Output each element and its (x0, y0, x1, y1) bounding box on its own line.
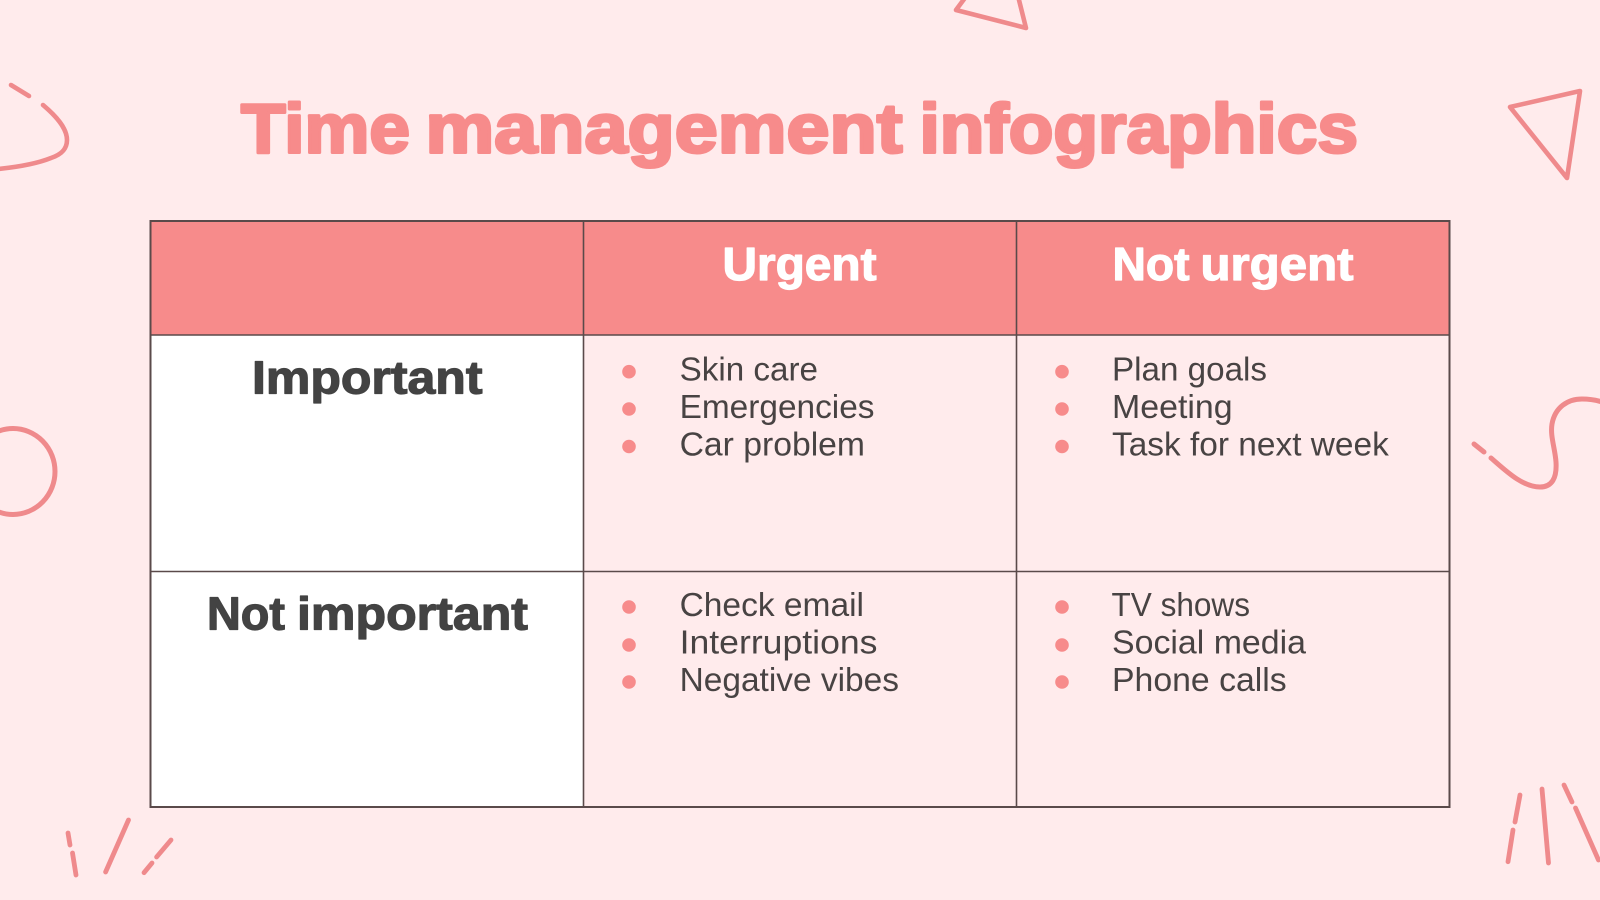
cell: urgent and important: Emergencies (680, 389, 874, 426)
column header: Urgent: Urgent (722, 238, 876, 290)
column header: Not urgent: urgent (1200, 238, 1354, 290)
title (241, 90, 1358, 168)
cell: not urgent and not important: TV shows (1112, 587, 1250, 624)
doodle: bottom-right dashes (1508, 785, 1598, 863)
column header: Not urgent (1112, 238, 1354, 290)
cell: not urgent and important (1055, 352, 1389, 464)
cell: not urgent and not important: Phone calls (1112, 662, 1287, 699)
cell: urgent and important: Skin care (680, 352, 818, 388)
row header: Not important (207, 588, 528, 640)
cell: not urgent and important: Meeting (1112, 389, 1233, 426)
row header: Not important: important (297, 588, 528, 640)
table header band (150, 221, 1450, 335)
cell: urgent and not important: Check email (680, 587, 864, 624)
cell: urgent and not important (622, 587, 899, 699)
column header: Not urgent: Not (1112, 238, 1190, 290)
title: management (426, 90, 902, 168)
table (150, 221, 1450, 807)
title: infographics (920, 90, 1358, 168)
cell: not urgent and not important (1055, 587, 1306, 699)
cell: urgent and important: Car problem (680, 426, 865, 464)
cell: urgent and not important: Negative vibes (680, 662, 899, 699)
doodle: right triangle (1510, 91, 1580, 178)
cell: not urgent and important: Task for next week (1112, 426, 1389, 464)
title: Time (241, 90, 410, 168)
row header: Not important: Not (207, 588, 285, 640)
doodle: top triangle (956, 0, 1026, 28)
row label column background (150, 335, 584, 807)
cell: urgent and not important: Interruptions (680, 625, 878, 662)
doodle: left circle (0, 428, 55, 514)
row header: Important: Important (252, 352, 482, 404)
doodle: right squiggle (1474, 399, 1600, 487)
doodle: bottom-left dashes (68, 820, 171, 875)
doodle: top-left swirl (0, 85, 67, 169)
table grid (150, 221, 1450, 807)
cell: not urgent and important: Plan goals (1112, 352, 1267, 388)
cell: not urgent and not important: Social media (1112, 625, 1306, 662)
cell: urgent and important (622, 352, 874, 464)
